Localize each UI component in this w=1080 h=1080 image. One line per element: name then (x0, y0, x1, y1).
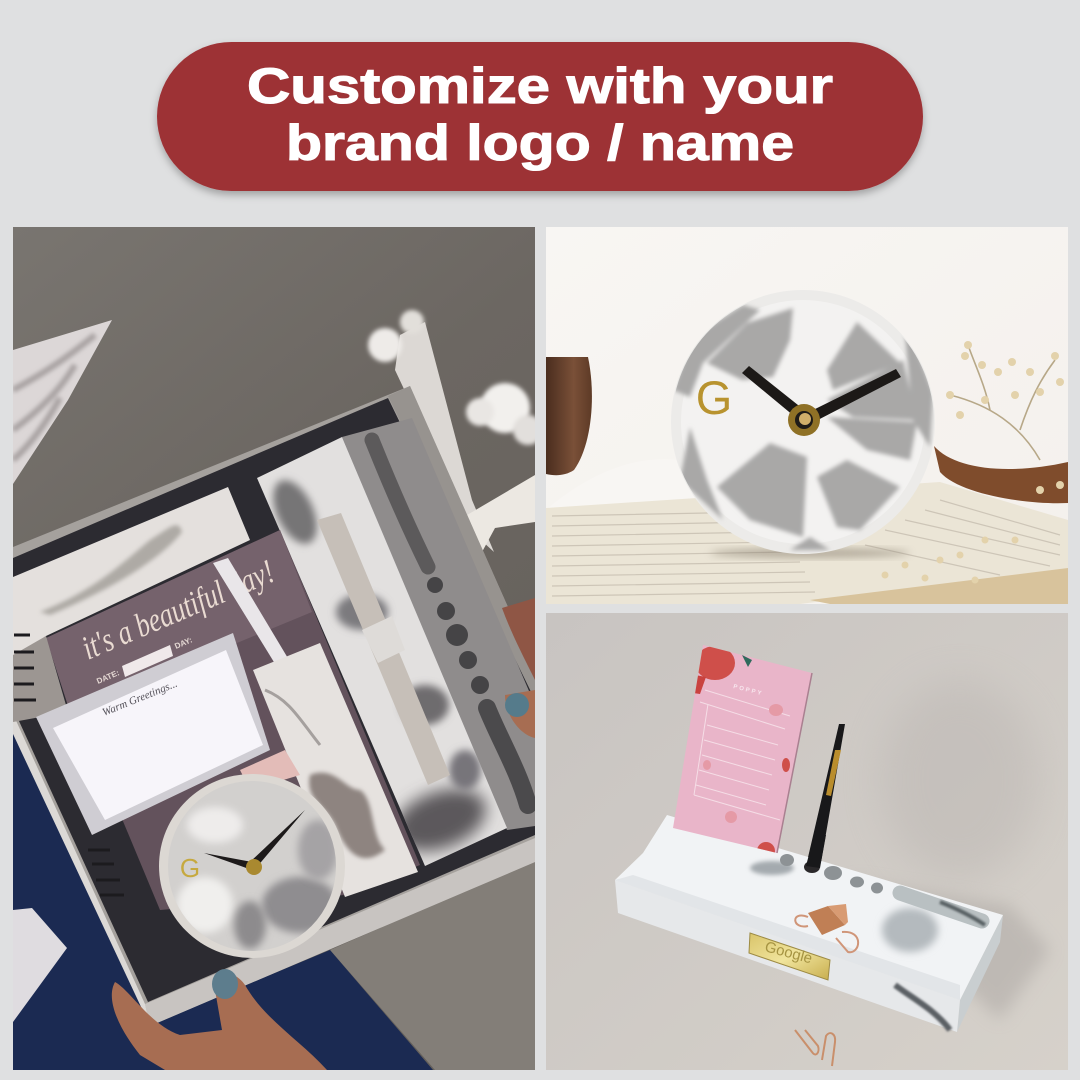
ruler (317, 513, 450, 785)
pen lower body over organiser (806, 835, 826, 868)
pen (806, 724, 845, 868)
notepad rules (694, 690, 790, 820)
ruler band (362, 616, 399, 663)
grey pen holder band (342, 418, 535, 830)
right lower grey wedge (827, 417, 917, 460)
box front lip (145, 838, 535, 1026)
navy surface (13, 725, 433, 1070)
photo panel: desk clock on open book (546, 227, 1068, 604)
clock hub (788, 404, 820, 436)
spiral binding (14, 635, 124, 895)
binder clip (795, 904, 858, 952)
soft shadow on cloth (880, 680, 1040, 880)
notepad label: POPPY (733, 684, 764, 697)
top right grey wedge (827, 322, 900, 390)
white bookmark ribbon (213, 558, 287, 662)
shadow under clock (710, 548, 910, 558)
heading text: Customize with your (247, 58, 833, 114)
left outer rim grey (673, 305, 760, 397)
notepad (673, 645, 812, 860)
backdrop (546, 613, 1068, 1070)
wooden bowl (546, 357, 592, 475)
bark piece (934, 446, 1068, 503)
open book (546, 482, 1068, 604)
pink paper (240, 750, 300, 780)
bottom left grey wedge (717, 443, 807, 537)
paper clips (795, 1030, 835, 1066)
painted nail right (505, 693, 529, 717)
clock face base (681, 300, 925, 544)
inner lip (615, 875, 960, 1000)
front marble vein (895, 985, 950, 1030)
box inner wall (388, 386, 535, 700)
box outer (13, 386, 535, 1026)
heading text (247, 58, 833, 171)
tray pen slot (372, 440, 428, 567)
gold name plate: Google (763, 938, 814, 967)
clock hands (204, 810, 305, 870)
title banner (157, 42, 923, 191)
right rim grey (903, 313, 933, 447)
organiser holes (780, 854, 883, 894)
card script text: it's a beautiful day! (77, 553, 280, 667)
hand at the bottom (112, 969, 327, 1070)
organiser top face (615, 815, 1003, 1000)
heading text: brand logo / name (286, 115, 794, 171)
long marble tray (257, 418, 535, 866)
box left edge (13, 714, 150, 1026)
bottom rim grey (790, 537, 830, 550)
lighter lower right surface (330, 860, 535, 1070)
card date field (95, 635, 194, 686)
card date field: DATE: (95, 668, 121, 686)
tray lower slot (487, 708, 528, 805)
greeting text: Warm Greetings... (101, 678, 179, 719)
gift box (13, 386, 535, 1026)
organiser shadow (850, 880, 1050, 1020)
marble bookmark (253, 643, 418, 897)
marble notebook (13, 487, 250, 722)
black shredded filling (13, 398, 535, 1002)
backdrop (13, 227, 535, 1070)
clock hour hand (742, 366, 808, 421)
clock minute hand (805, 369, 901, 423)
clock G logo: G (696, 371, 732, 424)
painted nail (212, 969, 238, 999)
white cloth (546, 459, 800, 540)
concrete clock (671, 290, 935, 554)
lower left rim grey (680, 427, 723, 520)
clock body (671, 290, 935, 554)
card date field: DAY: (173, 635, 194, 651)
clock G logo: G (180, 853, 200, 883)
flowers (368, 310, 543, 445)
top left grey wedge (707, 308, 793, 380)
photo panel: gift box flat lay (13, 227, 543, 1070)
gold name plate (749, 933, 830, 980)
bottom right grey wedge (817, 460, 900, 530)
white marbled half (257, 437, 507, 866)
notepad poppy (695, 646, 735, 680)
organiser long slot (900, 893, 985, 925)
backdrop (546, 227, 1068, 604)
greeting card (36, 633, 270, 835)
tray holes (427, 577, 489, 694)
notepad petals (703, 704, 783, 823)
right grey wedge (827, 360, 917, 420)
marble paper top left (13, 320, 112, 484)
marble desk clock (159, 774, 345, 958)
marble paper bottom left (13, 908, 67, 1022)
banner pill (157, 42, 923, 191)
ribbon (395, 322, 535, 552)
organiser right side (957, 915, 1003, 1032)
purple card (46, 530, 420, 910)
dried flower sprigs (882, 341, 1064, 584)
organiser front face (615, 880, 960, 1032)
fingers at right (502, 598, 535, 738)
clock centre (246, 859, 262, 875)
marble organiser (615, 645, 1003, 1032)
photo panel: marble desk organiser (546, 613, 1068, 1070)
